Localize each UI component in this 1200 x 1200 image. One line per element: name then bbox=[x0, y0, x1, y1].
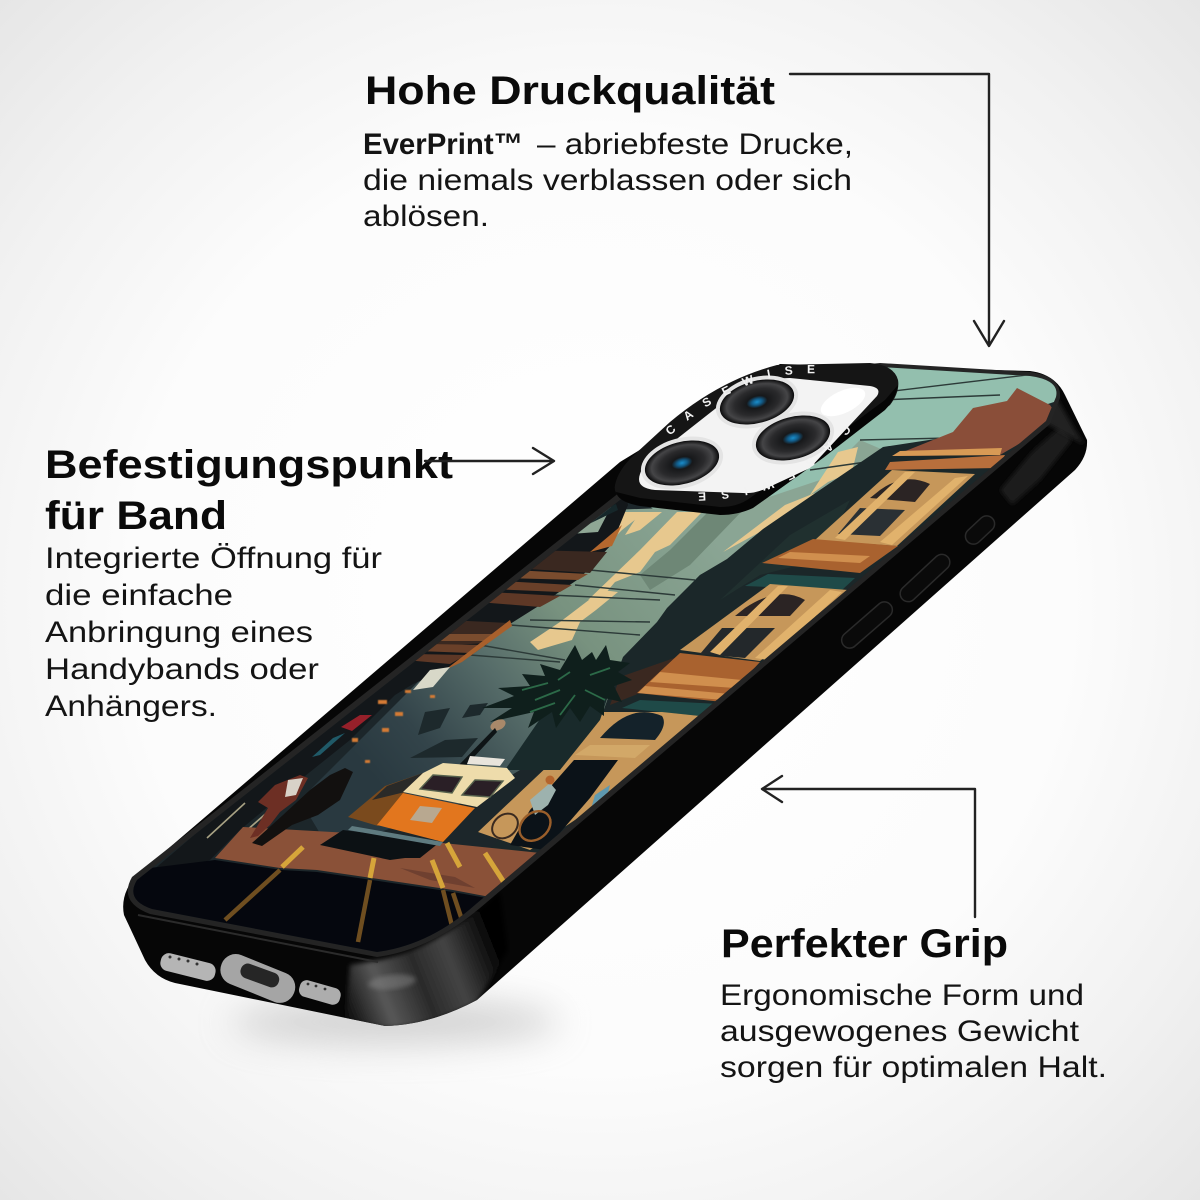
lens left bbox=[635, 428, 729, 498]
pedestrian two bbox=[252, 768, 353, 846]
palm tree bbox=[482, 645, 632, 770]
lit shopfront lines bbox=[207, 803, 270, 838]
heading: Befestigungspunkt bbox=[45, 443, 453, 487]
red shop sign bbox=[341, 715, 372, 731]
lamp post bbox=[490, 719, 506, 730]
camera bumper bbox=[615, 363, 898, 513]
upper facade bbox=[815, 470, 975, 546]
dark base bbox=[159, 857, 166, 863]
description: – abriebfeste Drucke, bbox=[537, 128, 853, 161]
lower facade bbox=[680, 584, 848, 661]
description: ablösen. bbox=[363, 200, 489, 233]
side buttons bbox=[838, 513, 998, 651]
description: Anhängers. bbox=[45, 690, 217, 723]
speaker left bbox=[159, 951, 217, 983]
street traffic lights bbox=[351, 689, 436, 764]
hazy street bbox=[300, 440, 895, 850]
description: Ergonomische Form und bbox=[720, 979, 1084, 1012]
charging port bbox=[216, 949, 300, 1007]
printed artwork bbox=[133, 367, 1056, 952]
heading: Hohe Druckqualität bbox=[365, 69, 775, 113]
description: EverPrint™ bbox=[363, 128, 523, 161]
entrance arch bbox=[478, 712, 700, 850]
brand text lower: CASEWISE bbox=[698, 427, 850, 501]
callout: strap attachment bbox=[45, 443, 453, 723]
heading: für Band bbox=[45, 494, 227, 538]
top roof bbox=[893, 388, 1060, 456]
tram orange front bbox=[377, 793, 475, 842]
side highlights and gloss bbox=[345, 395, 1085, 1028]
lens right bbox=[746, 403, 840, 473]
phone shadow bbox=[230, 1000, 560, 1044]
description: die einfache bbox=[45, 579, 233, 612]
bottom ports bbox=[138, 915, 378, 1007]
arrow: strap attachment bbox=[425, 448, 554, 474]
description: Handybands oder bbox=[45, 653, 319, 686]
lit stripes bbox=[530, 447, 858, 650]
screen rim bbox=[128, 363, 1060, 957]
case body bbox=[123, 364, 1087, 1026]
tram bbox=[348, 756, 515, 846]
pedestrians bbox=[250, 768, 353, 846]
description: Integrierte Öffnung für bbox=[45, 542, 382, 575]
arrow: print quality bbox=[790, 74, 1004, 346]
description bbox=[45, 542, 382, 723]
road markings in shade bbox=[225, 870, 462, 942]
description: die niemals verblassen oder sich bbox=[363, 164, 852, 197]
tram roof box bbox=[467, 756, 505, 766]
tram bumper bbox=[348, 826, 443, 846]
bottom inner edge shading bbox=[138, 915, 378, 962]
right dark building mass bbox=[604, 439, 936, 712]
street sign bbox=[413, 667, 450, 690]
description: sorgen für optimalen Halt. bbox=[720, 1051, 1107, 1084]
sky bbox=[650, 367, 1056, 508]
lens top bbox=[710, 367, 804, 437]
description: ausgewogenes Gewicht bbox=[720, 1015, 1080, 1048]
camera island bbox=[615, 363, 898, 515]
tram headplate bbox=[410, 806, 442, 823]
speaker right bbox=[297, 979, 342, 1006]
arrow: grip bbox=[762, 776, 975, 917]
brand text upper: CASEWISE bbox=[666, 365, 815, 434]
heading: Perfekter Grip bbox=[721, 922, 1008, 966]
description: Anbringung eines bbox=[45, 616, 313, 649]
callout: grip bbox=[720, 922, 1107, 1084]
lower foreground shade bbox=[60, 860, 560, 990]
description bbox=[363, 128, 853, 233]
description bbox=[720, 979, 1107, 1084]
camera glass plate bbox=[639, 378, 878, 493]
tram shadow bbox=[320, 830, 440, 860]
left buildings bbox=[157, 500, 628, 867]
brick ground bbox=[215, 827, 560, 897]
upper left building blocks bbox=[405, 504, 622, 670]
cars bbox=[410, 703, 488, 758]
people at entrance bbox=[487, 776, 610, 847]
pedestrian one bbox=[250, 775, 308, 838]
upper ledge bbox=[762, 539, 898, 573]
road markings bbox=[282, 843, 507, 888]
tram cream top bbox=[403, 763, 515, 807]
tram windows bbox=[420, 775, 462, 793]
heading bbox=[45, 443, 453, 538]
tram side bbox=[348, 773, 423, 826]
callout: print quality bbox=[363, 69, 853, 233]
overhead wires bbox=[470, 374, 1035, 662]
lower ledge bbox=[637, 653, 760, 702]
phone case bbox=[123, 363, 1088, 1026]
